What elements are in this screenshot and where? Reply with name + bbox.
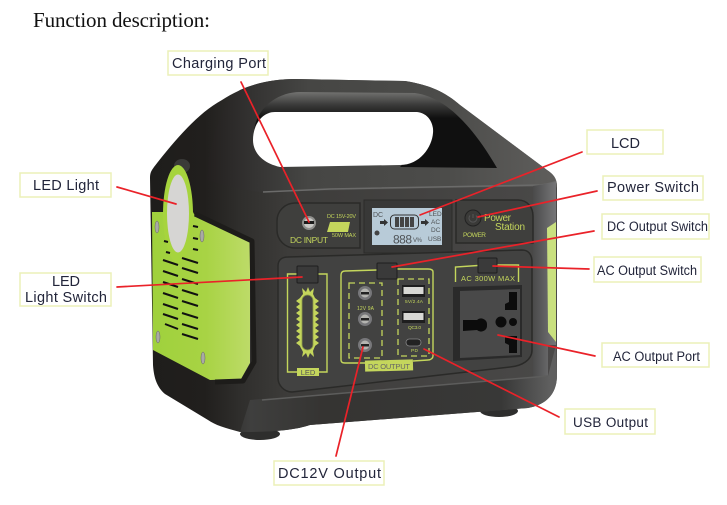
power station product — [150, 79, 557, 440]
right edge of casing — [533, 182, 556, 383]
rubber feet — [240, 405, 518, 440]
AC output module — [453, 258, 522, 361]
USB captions: QC3.0 — [408, 325, 421, 331]
label: AC Output Switch: AC Output Switch — [597, 263, 697, 278]
DC left dashed group — [349, 283, 382, 358]
label: DC Output Switch — [602, 214, 709, 239]
title: Function description: — [33, 8, 210, 32]
label: LED Light — [20, 173, 111, 197]
label: LED Light Switch: LED — [52, 274, 80, 290]
voltage text: DC 15V-20V — [327, 214, 356, 220]
handle inner rim — [254, 92, 497, 168]
label: USB Output — [565, 409, 655, 434]
line: LED switch — [117, 277, 302, 287]
label: LED Light Switch: Light Switch — [25, 290, 107, 306]
AC switch — [478, 258, 497, 273]
side vents — [163, 226, 198, 339]
label: Power Switch — [603, 176, 703, 200]
label: LED Light: LED Light — [33, 178, 99, 194]
input text: DC INPUT — [290, 235, 328, 245]
LED bar — [300, 293, 315, 352]
LCD labels: V% — [413, 238, 423, 244]
brand text 2: Station — [495, 222, 525, 233]
LED frame — [288, 274, 327, 372]
DC right dashed group — [398, 279, 429, 356]
LCD labels — [373, 211, 442, 246]
LED tag: LED — [301, 368, 316, 377]
USB captions: PD — [411, 348, 419, 354]
AC text: AC 300W MAX — [461, 274, 515, 283]
LCD labels: AC — [431, 219, 440, 226]
AC socket — [453, 285, 522, 361]
handle surface — [207, 79, 557, 192]
label: Power Switch: Power Switch — [607, 180, 699, 196]
LED bar centre — [302, 295, 313, 350]
power caption: POWER — [463, 232, 486, 239]
LCD labels: LED — [429, 211, 442, 218]
LCD arrows — [380, 219, 429, 226]
line: DC12V output — [336, 347, 363, 456]
control panel: DC input — [277, 203, 360, 248]
USB captions — [405, 299, 424, 354]
power button — [465, 210, 481, 226]
lower front highlight — [262, 376, 548, 400]
12V caption: 12V 9A — [357, 306, 375, 312]
green right side strip — [547, 222, 556, 342]
label: AC Output Port: AC Output Port — [613, 349, 700, 364]
side screws — [155, 221, 205, 364]
label: LCD: LCD — [611, 136, 640, 152]
green side panel — [152, 212, 250, 380]
LCD labels: USB — [428, 236, 441, 243]
USB captions: 5V/2.4A — [405, 299, 424, 305]
label: Charging Port: Charging Port — [172, 56, 266, 72]
LED module — [288, 266, 327, 377]
lower front band — [240, 345, 557, 432]
label: DC12V Output — [274, 461, 384, 485]
line: charging port — [241, 82, 309, 222]
AC frame — [456, 265, 518, 282]
label: LCD — [587, 130, 663, 154]
LED switch — [297, 266, 318, 283]
label: LED Light Switch — [20, 273, 111, 306]
line: LED light — [117, 187, 176, 204]
label: DC Output Switch: DC Output Switch — [607, 219, 708, 234]
black trim beside the green panel — [195, 214, 254, 382]
USB ports — [402, 285, 425, 323]
LED sunburst rays — [296, 287, 319, 358]
label: DC12V Output: DC12V Output — [278, 466, 381, 482]
line: DC output switch — [392, 231, 594, 267]
LCD labels: 888 — [393, 232, 412, 246]
DC tag: DC OUTPUT — [368, 362, 410, 371]
brand text: Power — [484, 213, 512, 224]
DC sockets — [358, 286, 372, 352]
watt text: 50W MAX — [332, 233, 356, 239]
line: power switch — [478, 191, 597, 217]
label: Charging Port — [168, 51, 268, 75]
DC output module — [341, 263, 433, 372]
LED lamp mount — [174, 159, 190, 173]
line: LCD — [420, 152, 582, 215]
label: USB Output: USB Output — [573, 415, 648, 430]
label: AC Output Port — [602, 343, 709, 367]
DC output switch — [377, 263, 397, 279]
callout lines — [117, 82, 597, 456]
line: AC output port — [498, 335, 595, 356]
LCD — [364, 200, 452, 253]
label: AC Output Switch — [594, 257, 701, 282]
LCD labels: DC — [431, 227, 441, 234]
LCD indicator — [374, 230, 380, 236]
LCD battery — [390, 215, 418, 229]
solar icon — [327, 222, 350, 232]
USB-C port — [406, 339, 421, 346]
LCD screen — [372, 208, 442, 245]
DC frame — [341, 269, 433, 363]
lower control panel — [278, 250, 532, 392]
body silhouette — [150, 79, 557, 432]
line: AC output switch — [493, 266, 589, 269]
LCD labels: DC — [373, 212, 383, 219]
power panel — [456, 200, 533, 243]
front shoulder highlight — [263, 181, 556, 192]
charging socket — [302, 216, 316, 230]
LED light lens — [163, 165, 193, 263]
line: USB output — [424, 349, 559, 417]
handle opening — [253, 112, 433, 167]
